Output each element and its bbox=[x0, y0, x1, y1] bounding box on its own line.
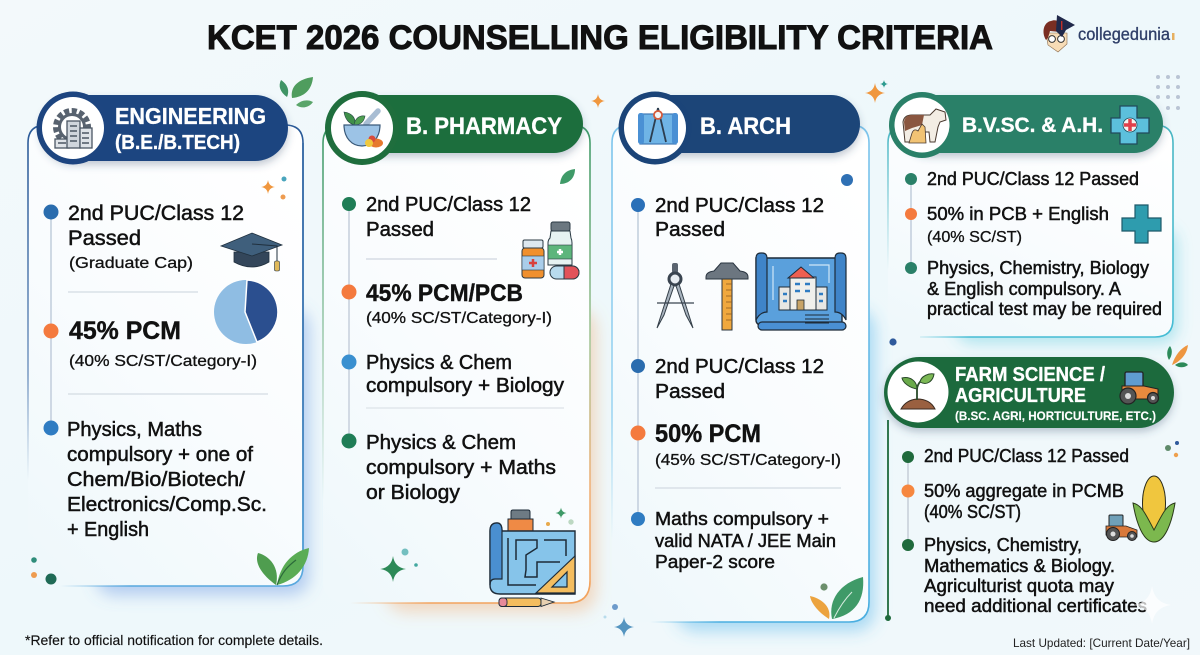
text: physics and chem plus maths or biology bbox=[366, 432, 556, 504]
text: 50% pcm: 50% PCM bbox=[655, 420, 761, 448]
text: 45% pcm/pcb: 45% PCM/PCB bbox=[366, 280, 523, 307]
text: subjects: practical test may be required bbox=[927, 299, 1162, 319]
decoration: sparkle and dots bbox=[31, 176, 286, 584]
icon: leaves bbox=[810, 577, 863, 619]
text: 50% in pcb: 50% in PCB + English bbox=[927, 204, 1109, 224]
header: farm science bbox=[884, 357, 1174, 428]
icon: leaves bbox=[257, 548, 309, 585]
header: b.v.sc. and a.h. bbox=[889, 92, 1163, 158]
chart: pie bbox=[214, 280, 278, 344]
text: physics and chem plus maths or biology: Physics & Chem bbox=[366, 432, 516, 454]
text: class 12 passed: 2nd PUC/Class 12 bbox=[366, 194, 531, 216]
header: b. pharmacy bbox=[325, 91, 583, 165]
text: physics and chem plus biology bbox=[366, 352, 564, 397]
decoration: lower blue sparkle bbox=[604, 604, 634, 637]
text: class 12 passed second: Passed bbox=[655, 380, 725, 403]
icon: tractor bbox=[1120, 372, 1158, 404]
timeline: b. arch bbox=[630, 198, 646, 526]
icon: compass on blueprint bbox=[638, 108, 678, 144]
text: 45% pcm: 45% PCM bbox=[69, 317, 181, 345]
text: class 12 passed: Passed bbox=[655, 218, 725, 241]
panel: b. arch bbox=[612, 92, 869, 622]
text: class 12 passed: (Graduate Cap) bbox=[69, 255, 193, 272]
text: class 12 passed: 2nd PUC/Class 12 bbox=[68, 202, 244, 225]
text: maths compulsory bbox=[655, 508, 836, 572]
text: subjects: Physics, Chemistry, Biology bbox=[927, 258, 1149, 278]
icon: teal cross bbox=[1122, 205, 1161, 243]
text: subjects bbox=[927, 258, 1162, 319]
text: class 12 passed: 2nd PUC/Class 12 Passed bbox=[924, 446, 1129, 466]
icon: medical cross bbox=[1111, 106, 1149, 144]
text: class 12 passed bbox=[68, 202, 244, 272]
icon: medicine bottles bbox=[522, 222, 579, 279]
icon: blueprint with building bbox=[756, 253, 846, 330]
decoration: faint sparkle bbox=[1133, 586, 1171, 624]
text: subjects: compulsory + one of bbox=[67, 444, 253, 466]
header: engineering bbox=[36, 92, 288, 164]
icon: leaf bbox=[560, 169, 575, 184]
text: class 12 passed second: 2nd PUC/Class 12 bbox=[655, 355, 824, 378]
panel: b.v.sc. and a.h. bbox=[888, 92, 1173, 337]
text: 50% aggregate bbox=[924, 481, 1124, 522]
text: 45% pcm: (40% SC/ST/Category-I) bbox=[69, 353, 257, 370]
header: farm science: FARM SCIENCE / bbox=[955, 364, 1105, 386]
header: engineering: ENGINEERING bbox=[115, 103, 266, 129]
header: b. arch: B. ARCH bbox=[700, 113, 791, 140]
icon: gear and buildings bbox=[55, 111, 92, 148]
logo: collegedunia: collegedunia bbox=[1078, 24, 1170, 44]
text: subjects and quota: Mathematics & Biology. bbox=[924, 556, 1115, 576]
decoration: small dots bbox=[1165, 441, 1179, 457]
footnote: *Refer to official notification for complete details. bbox=[25, 632, 323, 648]
text: subjects: Electronics/Comp.Sc. bbox=[67, 494, 267, 516]
panel: engineering bbox=[28, 92, 309, 586]
header: farm science: AGRICULTURE bbox=[955, 385, 1086, 407]
timeline: engineering bbox=[44, 204, 58, 436]
timeline: b. pharmacy bbox=[342, 197, 356, 448]
text: subjects bbox=[67, 419, 267, 541]
text: 50% aggregate: (40% SC/ST) bbox=[924, 502, 1021, 522]
text: physics and chem plus maths or biology: or Biology bbox=[366, 482, 460, 504]
text: class 12 passed second bbox=[655, 355, 824, 403]
panel: farm science bbox=[884, 357, 1179, 624]
title: KCET 2026 COUNSELLING ELIGIBILITY CRITERIA bbox=[207, 19, 993, 57]
text: subjects: & English compulsory. A bbox=[927, 279, 1121, 299]
text: physics and chem plus biology: Physics & Chem bbox=[366, 352, 512, 374]
text: subjects: Physics, Maths bbox=[67, 419, 202, 441]
header: b. arch bbox=[618, 92, 860, 164]
text: subjects: + English bbox=[67, 519, 149, 541]
text: subjects: Chem/Bio/Biotech/ bbox=[67, 469, 245, 491]
text: 45% pcm/pcb: (40% SC/ST/Category-I) bbox=[366, 310, 552, 327]
header: farm science: (B.SC. AGRI, HORTICULTURE, ETC.) bbox=[955, 409, 1156, 423]
icon: sprout bbox=[901, 374, 935, 409]
text: class 12 passed bbox=[366, 194, 531, 241]
timeline: farm science bbox=[902, 451, 914, 551]
icon: t-square ruler bbox=[706, 263, 748, 330]
logo: collegedunia bbox=[1044, 15, 1174, 52]
text: subjects and quota bbox=[924, 535, 1147, 616]
text: 50% in pcb bbox=[927, 204, 1109, 246]
text: maths compulsory: Maths compulsory + bbox=[655, 508, 829, 529]
header: b.v.sc. and a.h.: B.V.SC. & A.H. bbox=[962, 114, 1103, 137]
text: 50% aggregate: 50% aggregate in PCMB bbox=[924, 481, 1124, 501]
icon: cow and dog bbox=[903, 109, 946, 143]
decoration: top leaves bbox=[280, 77, 313, 107]
text: maths compulsory: valid NATA / JEE Main bbox=[655, 530, 836, 551]
header: engineering: (B.E./B.TECH) bbox=[115, 132, 240, 154]
text: subjects and quota: Agriculturist quota may bbox=[924, 576, 1114, 596]
text: subjects and quota: need additional certificates bbox=[924, 596, 1147, 616]
icon: drawing compass bbox=[657, 263, 694, 328]
icon: mortar and pestle bbox=[344, 111, 383, 148]
icon: corn and tractor bbox=[1106, 476, 1175, 542]
panel: b. pharmacy bbox=[323, 91, 590, 606]
text: 50% in pcb: (40% SC/ST) bbox=[927, 229, 1022, 246]
text: 50% pcm: (45% SC/ST/Category-I) bbox=[655, 452, 841, 469]
text: physics and chem plus maths or biology: compulsory + Maths bbox=[366, 457, 556, 479]
text: maths compulsory: Paper-2 score bbox=[655, 551, 775, 572]
text: 45% pcm/pcb bbox=[366, 280, 552, 327]
text: class 12 passed: 2nd PUC/Class 12 bbox=[655, 194, 824, 217]
icon: graduate cap bbox=[221, 233, 282, 271]
text: class 12 passed bbox=[655, 194, 824, 241]
text: class 12 passed: 2nd PUC/Class 12 Passed bbox=[927, 169, 1139, 189]
decoration: sparkles and dots between panels bbox=[591, 75, 1188, 367]
text: class 12 passed: Passed bbox=[68, 227, 141, 250]
text: subjects and quota: Physics, Chemistry, bbox=[924, 535, 1082, 555]
text: 45% pcm bbox=[69, 317, 257, 370]
text: physics and chem plus biology: compulsory + Biology bbox=[366, 375, 564, 397]
text: 50% pcm bbox=[655, 420, 841, 469]
last updated: Last Updated: [Current Date/Year] bbox=[1013, 636, 1190, 650]
header: b. pharmacy: B. PHARMACY bbox=[406, 113, 562, 140]
icon: floor plan blueprint bbox=[490, 510, 575, 606]
decoration: sparkles and dots bbox=[380, 508, 574, 582]
timeline: b.v.sc. bbox=[905, 173, 917, 274]
text: class 12 passed: Passed bbox=[366, 219, 434, 241]
